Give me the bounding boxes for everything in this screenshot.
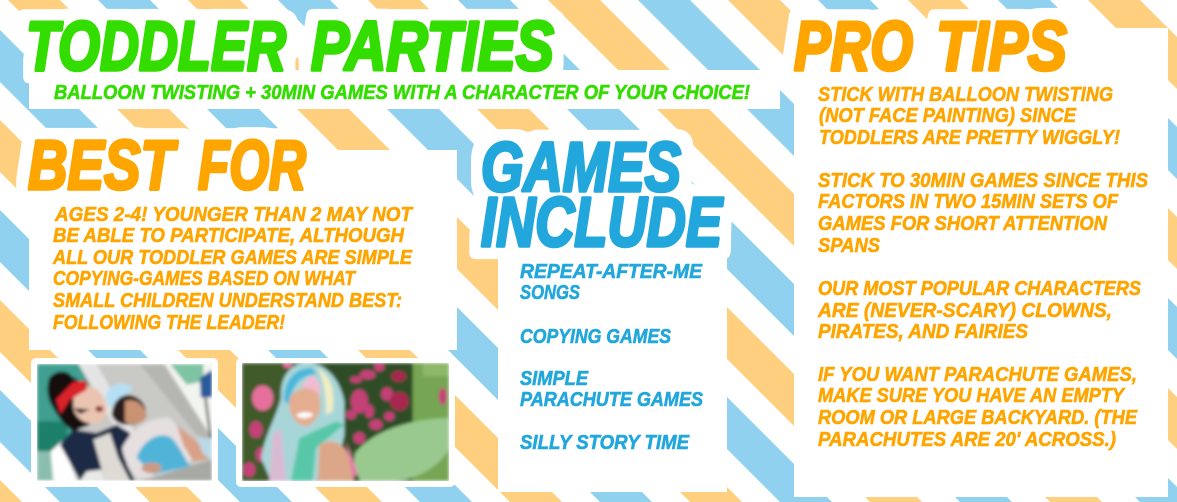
subtitle: BALLOON TWISTING + 30MIN GAMES WITH A CHARACTER OF YOUR CHOICE!	[54, 82, 750, 104]
heading: pro tips: PRO	[794, 7, 913, 85]
heading: best for: BEST	[28, 126, 178, 204]
text block: games list: SIMPLE	[520, 368, 589, 390]
text block: pro tips	[817, 84, 1149, 451]
title: TODDLER	[26, 7, 286, 85]
text block: best for: BE ABLE TO PARTICIPATE, ALTHOUGH	[53, 225, 405, 247]
title: PARTIES	[311, 7, 554, 85]
text block: pro tips: FACTORS IN TWO 15MIN SETS OF	[818, 191, 1119, 213]
heading: games include	[481, 128, 724, 261]
text block: pro tips: ARE (NEVER-SCARY) CLOWNS,	[817, 300, 1112, 322]
text block: pro tips: PIRATES, AND FAIRIES	[818, 321, 1029, 343]
text block: pro tips: GAMES FOR SHORT ATTENTION	[818, 213, 1108, 235]
photo: pirate and child	[31, 358, 218, 487]
title	[26, 7, 554, 85]
photo: fairy	[236, 358, 455, 487]
text block: best for: SMALL CHILDREN UNDERSTAND BEST:	[53, 290, 402, 312]
text block: best for: FOLLOWING THE LEADER!	[53, 312, 285, 334]
text block: pro tips: PARACHUTES ARE 20' ACROSS.)	[818, 429, 1116, 451]
text block: best for: AGES 2-4! YOUNGER THAN 2 MAY NOT	[54, 204, 414, 226]
text block: pro tips: (NOT FACE PAINTING) SINCE	[819, 105, 1077, 127]
text block: games list: REPEAT-AFTER-ME	[520, 261, 703, 283]
panel: pro tips	[794, 28, 1168, 497]
text block: pro tips: OUR MOST POPULAR CHARACTERS	[818, 278, 1142, 300]
text block: pro tips: TODDLERS ARE PRETTY WIGGLY!	[819, 127, 1120, 149]
text block: games list: PARACHUTE GAMES	[520, 389, 704, 411]
heading: pro tips: TIPS	[936, 7, 1067, 85]
text block: games list	[520, 261, 704, 454]
panel: games include	[498, 230, 727, 492]
heading: games include: INCLUDE	[481, 183, 724, 261]
heading: pro tips	[794, 7, 1067, 85]
text block: pro tips: ROOM OR LARGE BACKYARD. (THE	[818, 407, 1138, 429]
text block: pro tips: SPANS	[818, 235, 881, 257]
heading: best for: FOR	[198, 126, 306, 204]
heading: best for	[28, 126, 306, 204]
text block: best for: COPYING-GAMES BASED ON WHAT	[53, 268, 357, 290]
text block: games list: COPYING GAMES	[520, 326, 672, 348]
panel: best for	[29, 150, 457, 350]
text block: pro tips: STICK WITH BALLOON TWISTING	[818, 84, 1113, 106]
text block: games list: SILLY STORY TIME	[520, 432, 690, 454]
text block: best for	[52, 204, 414, 334]
text block: games list: SONGS	[520, 282, 581, 304]
text block: pro tips: STICK TO 30MIN GAMES SINCE THIS	[818, 170, 1149, 192]
text block: pro tips: IF YOU WANT PARACHUTE GAMES,	[818, 364, 1137, 386]
heading: games include: GAMES	[481, 128, 681, 206]
text block: best for: ALL OUR TODDLER GAMES ARE SIMPLE	[52, 247, 413, 269]
subtitle panel	[29, 70, 780, 109]
text block: pro tips: MAKE SURE YOU HAVE AN EMPTY	[818, 385, 1126, 407]
